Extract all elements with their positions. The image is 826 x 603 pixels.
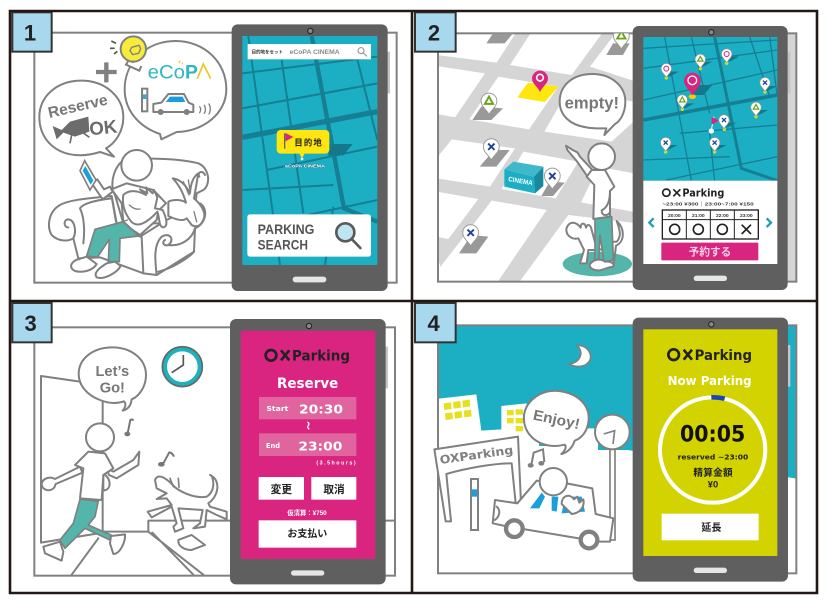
dog	[148, 475, 227, 532]
panel 2: choose an empty lot	[415, 12, 796, 290]
logo	[266, 349, 350, 365]
panel 1: search for parking from the sofa	[12, 12, 397, 291]
parking schedule card: ~23:00 ¥300｜23:00~7:00 ¥150	[662, 201, 754, 206]
sofa back	[112, 158, 208, 223]
music notes	[124, 419, 174, 467]
road sign	[595, 415, 630, 540]
buttons: change and cancel: 変更	[271, 483, 292, 496]
parking gate	[434, 437, 521, 530]
logo: Parking	[292, 349, 350, 365]
timer ring: ¥0	[708, 479, 718, 489]
illustration: sofa, dog and person	[49, 150, 208, 278]
illustration: walking person and dog	[42, 419, 227, 561]
logo: Parking	[695, 348, 752, 364]
speech bubble: eCoPA idea: eCo	[148, 63, 185, 84]
end time: 23:00	[298, 439, 343, 454]
left arm	[42, 467, 82, 490]
provisional amount: 仮清算：¥750	[287, 508, 327, 517]
parking schedule card: 22:00	[716, 213, 729, 219]
panel 3: reservation and leaving home	[12, 303, 395, 584]
phone in hand	[80, 161, 96, 190]
head	[588, 143, 615, 170]
icon: plus	[96, 62, 117, 82]
end time: End	[266, 441, 280, 450]
end time	[259, 433, 356, 466]
start time: 20:30	[299, 401, 343, 416]
badge: step 3	[12, 303, 52, 342]
button: extend	[662, 514, 759, 540]
speech bubble: empty	[560, 74, 625, 135]
badge: step 3: 3	[25, 311, 37, 336]
shoes	[590, 260, 614, 270]
timer ring	[660, 397, 765, 503]
person torso	[112, 183, 166, 235]
person shoes	[71, 257, 97, 272]
badge: step 2	[415, 12, 456, 52]
shirt	[75, 452, 113, 500]
parking search button: PARKING	[258, 222, 314, 237]
buttons: change and cancel	[259, 477, 356, 500]
legs	[60, 499, 111, 548]
destination marker	[277, 130, 353, 168]
timer ring: 00:05	[680, 422, 745, 447]
parking schedule card	[643, 181, 777, 264]
speech bubble: Let's Go: Go!	[100, 381, 125, 397]
speech bubble: Let's Go	[79, 347, 146, 411]
sofa scroll	[199, 172, 205, 177]
parking lots and pins	[459, 28, 630, 253]
icon: moon	[569, 345, 591, 366]
speech bubble: eCoPA idea: P	[185, 63, 198, 84]
phone map	[643, 37, 777, 181]
phone: parking availability	[633, 26, 790, 290]
parking gate: OXParking	[439, 443, 514, 467]
heading: Now Parking: Now Parking	[668, 373, 752, 388]
heading: Reserve: Reserve	[277, 376, 338, 392]
button: pay: お支払い	[287, 527, 327, 540]
legs	[595, 217, 613, 262]
tilde separator	[307, 422, 309, 429]
shirt	[587, 170, 614, 219]
speech bubble: Let's Go: Let’s	[95, 364, 129, 380]
parking schedule card: 予約する	[689, 246, 731, 259]
street map	[435, 32, 796, 283]
phone: now parking screen	[633, 318, 790, 582]
button: extend: 延長	[701, 522, 721, 534]
search bar	[248, 44, 371, 59]
person arm holding phone	[92, 179, 113, 199]
icon: music notes	[528, 449, 544, 468]
timer ring: 精算金額	[693, 467, 733, 479]
logo	[668, 348, 752, 364]
right arm	[107, 452, 139, 478]
search bar: eCoPA CINEMA	[290, 49, 340, 56]
start time: Start	[266, 404, 289, 413]
person head	[121, 150, 152, 181]
speech bubble: Reserve OK	[39, 81, 123, 157]
building: cinema: CINEMA	[508, 176, 533, 187]
illustration: door and floor	[41, 376, 395, 575]
icon: light bulb	[110, 36, 146, 71]
building: cinema	[504, 162, 543, 193]
parking schedule card: 20:00	[668, 213, 681, 219]
phone: reservation screen	[230, 319, 388, 584]
parking schedule card: Parking	[682, 188, 724, 200]
start time	[259, 397, 356, 419]
speech bubble: empty: empty!	[565, 93, 619, 112]
illustration: person and dog	[563, 143, 632, 276]
speech bubble: Enjoy	[524, 391, 589, 454]
destination marker: eCoPA CINEMA	[285, 163, 326, 168]
button: pay	[259, 520, 356, 548]
head	[86, 423, 114, 451]
badge: step 4	[415, 303, 456, 342]
person legs	[87, 222, 138, 262]
shoes	[43, 542, 63, 561]
belly	[103, 473, 110, 491]
speech bubble: Enjoy: Enjoy!	[532, 408, 581, 433]
dog shoes	[178, 535, 205, 550]
panel 4: now parking	[415, 303, 796, 582]
parking search button	[247, 214, 371, 257]
person bent arm and hand	[123, 187, 166, 227]
destination marker: 目的地	[294, 137, 322, 147]
night sky and town	[438, 325, 796, 573]
speech bubble: Reserve OK: OK	[88, 115, 119, 139]
badge: step 4: 4	[428, 311, 441, 336]
speech bubble: eCoPA idea	[125, 41, 226, 139]
speech bubble: Reserve OK: Reserve	[46, 92, 109, 122]
arm pointing	[566, 146, 593, 178]
parking schedule card: 23:00	[740, 213, 753, 219]
illustration: person driving a car	[493, 468, 613, 548]
end time: (3.5hours)	[316, 460, 356, 466]
badge: step 1	[12, 12, 52, 52]
parking schedule card: 21:00	[692, 213, 705, 219]
badge: step 2: 2	[428, 20, 440, 45]
badge: step 1: 1	[24, 20, 36, 45]
search bar: 目的地をセット	[252, 49, 283, 56]
phone: map screen	[232, 24, 390, 291]
buttons: change and cancel: 取消	[323, 483, 345, 496]
timer ring: reserved ~23:00	[678, 453, 748, 462]
parking search button: SEARCH	[258, 237, 308, 252]
dog on the sofa	[168, 173, 204, 226]
dog	[566, 221, 623, 263]
icon: clock	[162, 347, 202, 387]
sofa body and arms	[49, 196, 205, 275]
